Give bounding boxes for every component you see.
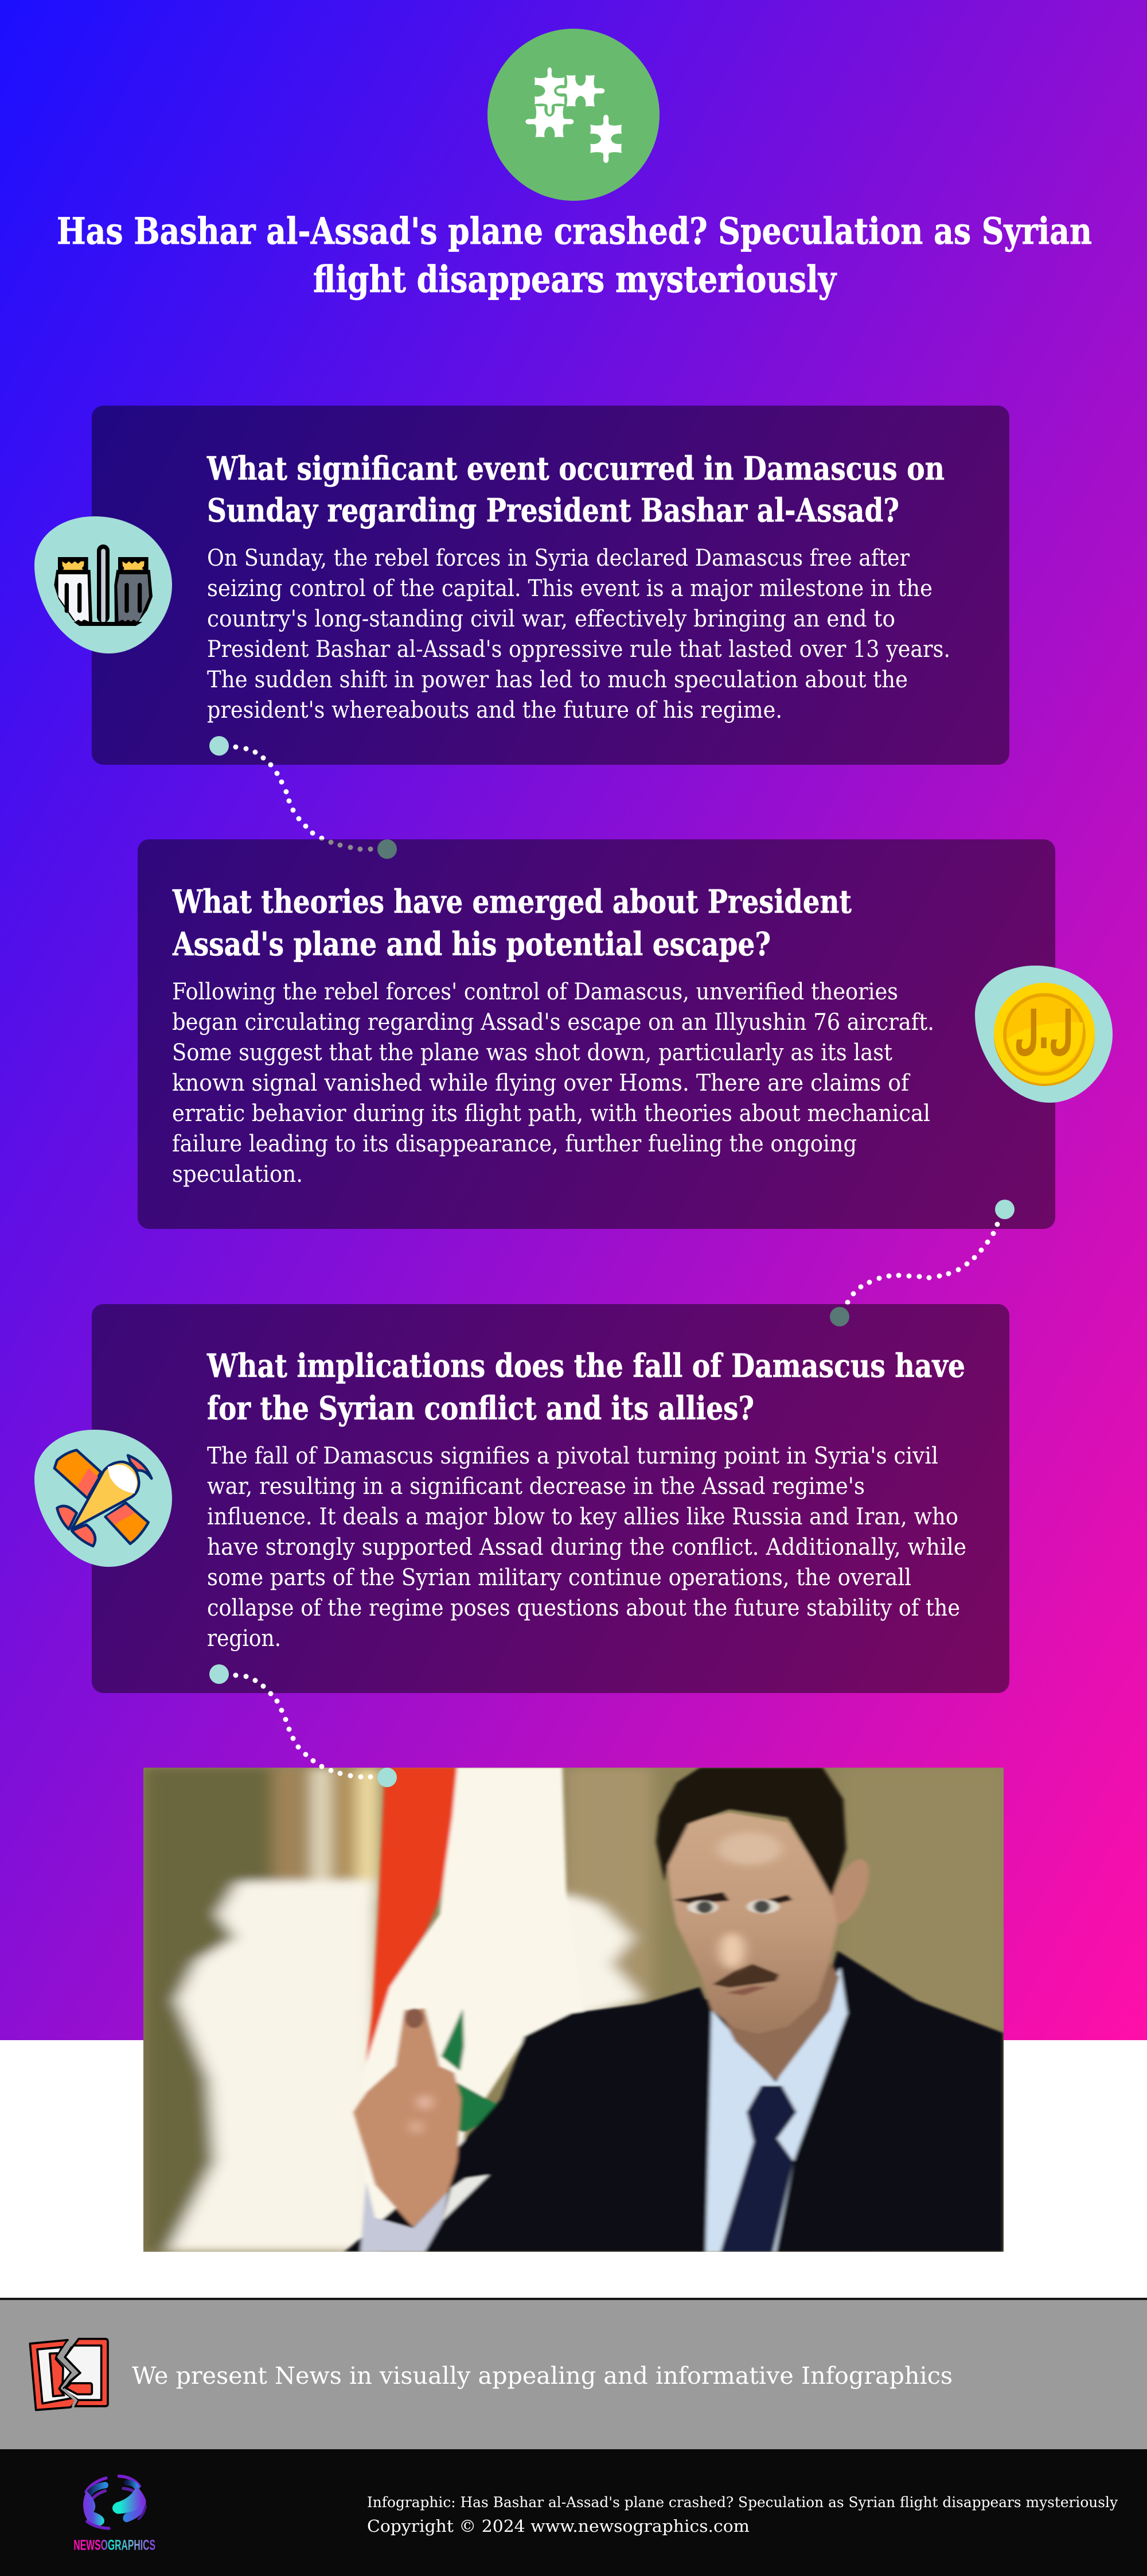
panel: card 3 background	[92, 1304, 1009, 1693]
text block: card 1 body: seizing control of the capital. This event is a major milestone in the	[207, 575, 933, 602]
text block: card 1 body: country's long-standing civil war, effectively bringing an end to	[207, 606, 895, 632]
heading: card 1: Sunday regarding President Bashar al-Assad?	[207, 492, 899, 530]
icon: toy plane on mint blob	[34, 1430, 172, 1567]
text block: card 3 body: The fall of Damascus signifies a pivotal turning point in Syria's civil	[207, 1443, 938, 1469]
heading: card 1: What significant event occurred in Damascus on	[206, 450, 945, 488]
text block: card 2 body: known signal vanished while flying over Homs. There are claims of	[172, 1070, 911, 1096]
title: flight disappears mysteriously	[313, 258, 837, 301]
panel: plane theories text	[172, 883, 934, 1188]
gradient background	[0, 0, 1147, 2040]
text block: copyright: Copyright © 2024 www.newsographics.com	[367, 2516, 750, 2536]
icon: Newsographics logo	[73, 2476, 155, 2554]
logo wordmark: NEWSOGRAPHICS	[73, 2538, 155, 2554]
panel: card 1 background	[92, 406, 1009, 765]
arrow: dotted connector 2	[830, 1200, 1015, 1326]
panel: card 2 background	[138, 839, 1055, 1229]
panel: Damascus event text	[206, 450, 950, 723]
text block: card 1 body: The sudden shift in power has led to much speculation about the	[207, 667, 908, 693]
arrow: dotted connector 3	[209, 1664, 397, 1787]
heading: card 2	[172, 883, 852, 963]
text block: card 2 body: began circulating regarding Assad's escape on an Illyushin 76 aircraft.	[172, 1009, 934, 1036]
text block: card 3 body: have strongly supported Assad during the conflict. Additionally, while	[207, 1534, 966, 1561]
heading: card 3: What implications does the fall of Damascus have	[206, 1347, 965, 1385]
heading: card 2: Assad's plane and his potential escape?	[172, 925, 771, 963]
heading: card 3	[206, 1347, 965, 1427]
photo: Bashar al-Assad at the Syrian flag	[143, 1768, 1004, 2252]
icon: palace towers on mint blob	[34, 516, 172, 653]
text block: card 2 body	[172, 979, 934, 1188]
arrow: dotted connector 1	[209, 736, 397, 859]
title	[57, 210, 1092, 301]
text block: card 3 body: war, resulting in a significant decrease in the Assad regime's	[207, 1473, 865, 1500]
text block: source line: Infographic: Has Bashar al-Assad's plane crashed? Speculation as Syrian flight disappears mysteriously	[367, 2494, 1118, 2511]
panel: footer	[0, 2449, 1147, 2576]
icon: cracked news card	[30, 2339, 108, 2410]
text block: card 2 body: Some suggest that the plane was shot down, particularly as its last	[172, 1040, 892, 1066]
panel: implications text	[206, 1347, 966, 1652]
text block: card 3 body: some parts of the Syrian military continue operations, the overall	[207, 1565, 911, 1591]
text block: card 1 body: On Sunday, the rebel forces in Syria declared Damascus free after	[207, 545, 910, 571]
text block: card 3 body: region.	[207, 1625, 281, 1652]
text block: card 3 body: collapse of the regime poses questions about the future stability of the	[207, 1595, 960, 1621]
icon: puzzle pieces in green circle	[487, 29, 660, 201]
text block: card 2 body: Following the rebel forces' control of Damascus, unverified theories	[172, 979, 898, 1005]
text block: card 3 body: influence. It deals a major blow to key allies like Russia and Iran, who	[207, 1504, 958, 1530]
heading: card 1	[206, 450, 945, 530]
heading: card 2: What theories have emerged about President	[172, 883, 852, 921]
icon: gold coin on mint blob	[975, 966, 1113, 1103]
text block: tagline: We present News in visually appealing and informative Infographics	[132, 2362, 953, 2390]
text block: card 2 body: erratic behavior during its flight path, with theories about mechanical	[172, 1100, 930, 1127]
text block: card 1 body: president's whereabouts and the future of his regime.	[207, 697, 782, 723]
text block: card 2 body: speculation.	[172, 1161, 303, 1188]
text block: card 1 body	[207, 545, 950, 723]
text block: card 1 body: President Bashar al-Assad's oppressive rule that lasted over 13 years.	[207, 636, 950, 663]
text block: card 2 body: failure leading to its disappearance, further fueling the ongoing	[172, 1131, 857, 1157]
text block: card 3 body	[207, 1443, 966, 1652]
panel: footer banner	[0, 2298, 1147, 2449]
icon label: coin currency mark: ل.ل	[1015, 1001, 1073, 1060]
heading: card 3: for the Syrian conflict and its allies?	[207, 1390, 754, 1427]
